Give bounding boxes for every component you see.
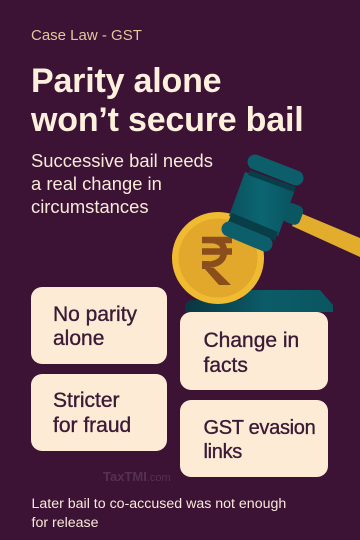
subtitle: a real change in: [31, 173, 162, 194]
icon: sounding block: [185, 290, 333, 312]
title: Parity alone: [31, 62, 221, 100]
footer note: Later bail to co-accused was not enough: [32, 496, 286, 512]
icon: rupee coin: [172, 212, 264, 304]
title: [30, 62, 303, 139]
card: GST evasion links: GST evasion: [204, 416, 315, 438]
card: no parity alone: [30, 287, 166, 364]
gavel lower band: [228, 213, 278, 241]
title: won’t secure bail: [31, 101, 303, 139]
watermark: TaxTMI.com: [103, 469, 171, 484]
card: change in facts: [180, 312, 328, 390]
card: GST evasion links: [180, 400, 328, 477]
card: no parity alone: alone: [53, 327, 104, 350]
card: no parity alone: No parity: [53, 302, 137, 326]
card: stricter for fraud: [30, 374, 166, 451]
card: stricter for fraud: Stricter: [53, 389, 120, 412]
card: GST evasion links: links: [204, 441, 242, 463]
subtitle: Successive bail needs: [31, 150, 213, 171]
icon: gavel: [228, 162, 360, 257]
gavel head body: [229, 172, 295, 236]
card: change in facts: Change in: [204, 329, 299, 352]
card: stricter for fraud: for fraud: [53, 414, 131, 436]
subtitle: circumstances: [31, 196, 149, 217]
subtitle: [31, 150, 213, 217]
icon: rupee symbol: [202, 240, 232, 285]
card: change in facts: facts: [204, 354, 248, 376]
footer note: [32, 496, 286, 531]
footer note: for release: [32, 515, 99, 531]
eyebrow label: Case Law - GST: [31, 27, 142, 44]
gavel upper band: [248, 170, 296, 192]
gavel bottom cap: [229, 229, 265, 244]
gavel top cap: [255, 162, 296, 178]
gavel neck: [281, 201, 305, 227]
gavel handle: [292, 212, 360, 257]
